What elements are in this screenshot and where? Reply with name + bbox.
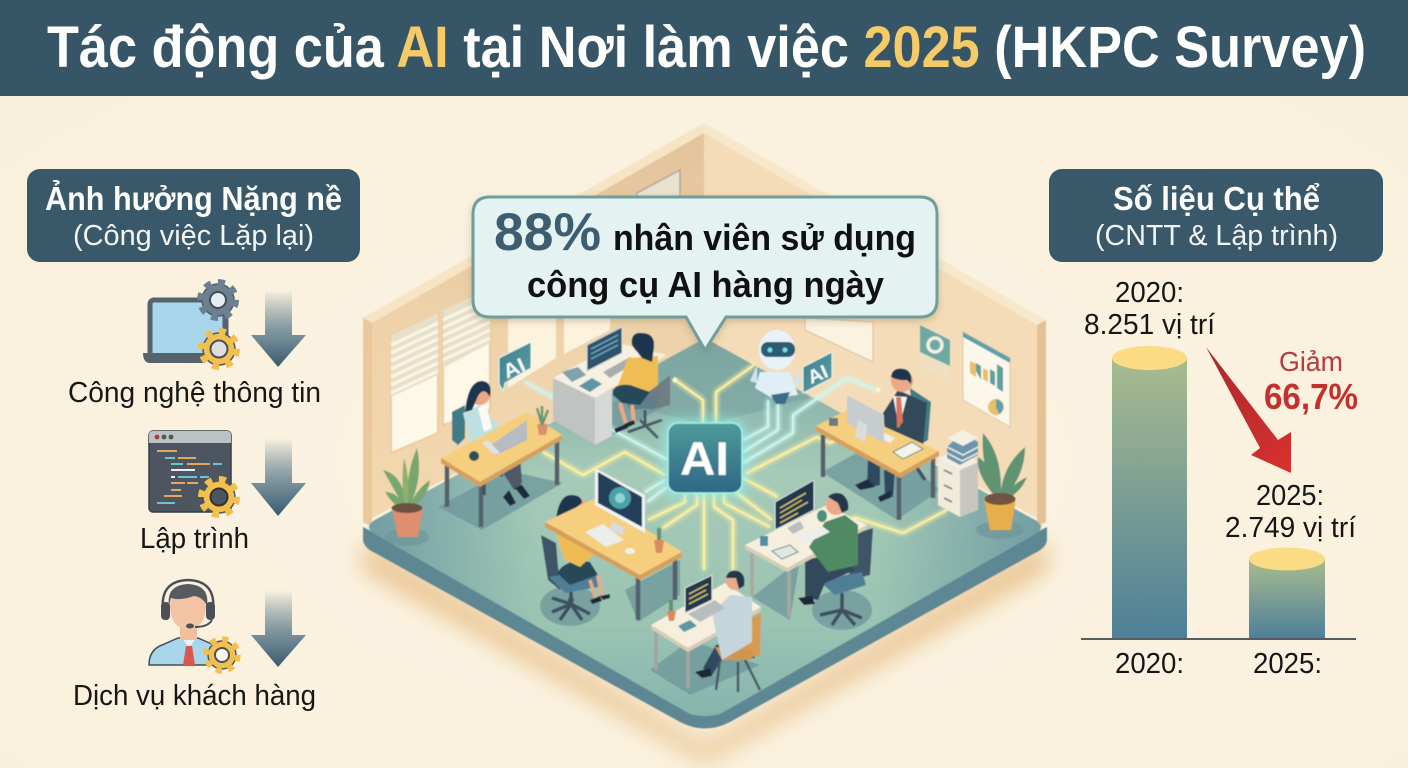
label: 2025 value: 2025:: [1256, 480, 1324, 512]
icon: laptop with gears: [143, 282, 237, 367]
bar: 2025: [1249, 548, 1325, 638]
floor plant right: [978, 433, 1027, 530]
heading: heavy impact: (Công việc Lặp lại): [73, 220, 314, 252]
robot assistant: [750, 330, 802, 404]
callout: 88% daily AI use: 88%: [494, 203, 601, 262]
arrow: decline IT: [251, 290, 306, 367]
axis labels: [1115, 648, 1322, 680]
arrow: decline customer service: [251, 590, 306, 667]
label: 2020 value: 8.251 vị trí: [1084, 309, 1215, 341]
label: 2025 value: [1225, 480, 1356, 544]
lower left worker: [541, 468, 682, 620]
right desk worker: [816, 369, 939, 520]
node dots: [672, 378, 880, 392]
chart baseline: [1081, 638, 1356, 640]
AI chip: [664, 419, 746, 497]
floor plant left: [383, 448, 430, 537]
heading: heavy impact: Ảnh hưởng Nặng nề: [45, 180, 342, 217]
bottom worker: [651, 571, 761, 692]
floor shadow: [363, 540, 1047, 762]
label: 2020 value: [1084, 277, 1215, 341]
filing cabinet and books: [938, 430, 978, 517]
wall posters: [805, 318, 1010, 427]
tag: AI left: [499, 342, 531, 391]
heading: specific figures: Số liệu Cụ thể: [1113, 180, 1320, 217]
arrow: decline programming: [251, 438, 306, 516]
heading: specific figures: [1049, 169, 1383, 262]
label: 2025 value: 2.749 vị trí: [1225, 512, 1356, 544]
desk shadows: [385, 400, 1024, 695]
tag: AI right: [803, 352, 832, 393]
tag: AI left: AI: [500, 354, 529, 383]
bar: 2020: [1112, 346, 1187, 638]
callout: 88% daily AI use: [473, 197, 937, 350]
circuit lines: [525, 365, 947, 570]
walls: [363, 123, 1046, 527]
label: IT: Công nghệ thông tin: [68, 377, 321, 409]
windows: [391, 170, 680, 453]
label: decline percent: Giảm: [1279, 346, 1343, 377]
left desk worker: [441, 381, 562, 527]
label: customer service: Dịch vụ khách hàng: [73, 680, 316, 712]
AI chip: AI: [680, 432, 729, 485]
back desk worker: [553, 327, 670, 445]
axis labels: 2025:: [1253, 648, 1322, 680]
floor: [363, 338, 1047, 728]
panel: specific figures: [1049, 169, 1383, 680]
label: 2020 value: 2020:: [1115, 277, 1184, 309]
arrow: decline: [1206, 347, 1291, 473]
label: programming: Lập trình: [140, 523, 249, 555]
label: decline percent: [1264, 346, 1358, 417]
lower right worker: [745, 480, 873, 625]
label: decline percent: 66,7%: [1264, 376, 1358, 417]
icon: customer service agent: [149, 580, 238, 671]
title banner: [0, 0, 1408, 96]
icon: code window with gear: [149, 431, 237, 515]
illustration: isometric AI office: [363, 123, 1047, 762]
heading: specific figures: (CNTT & Lập trình): [1095, 220, 1338, 252]
title: Tác động của AI tại Nơi làm việc 2025 (HKPC Survey): [47, 15, 1366, 80]
axis labels: 2020:: [1115, 648, 1184, 680]
callout: 88% daily AI use: nhân viên sử dụng: [613, 217, 916, 258]
tag: AI right: AI: [805, 362, 831, 389]
callout: 88% daily AI use: công cụ AI hàng ngày: [527, 264, 884, 305]
heading: heavy impact: [27, 169, 360, 262]
panel: heavily affected jobs: [27, 169, 360, 712]
